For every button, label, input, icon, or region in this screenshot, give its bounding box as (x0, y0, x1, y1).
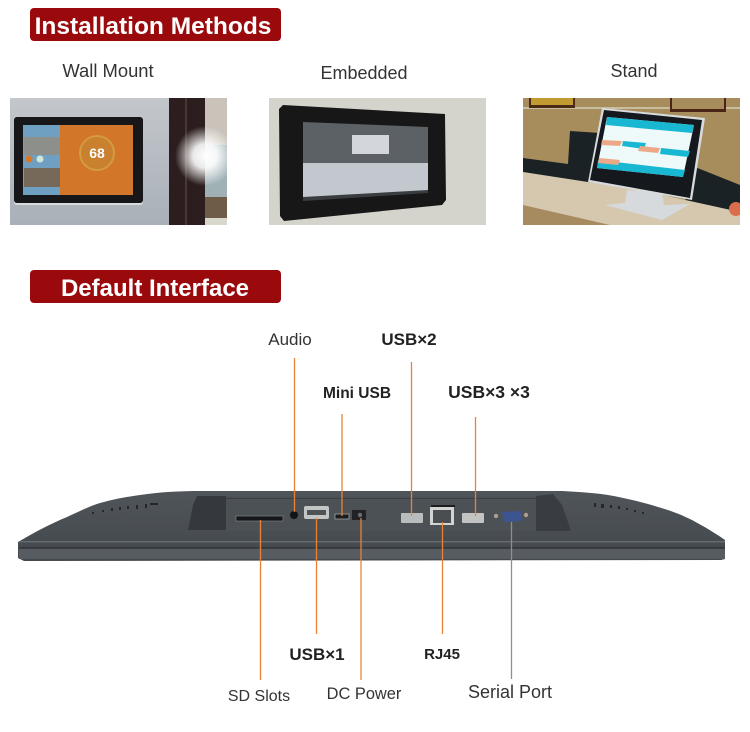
thermostat reading: 68 (89, 145, 105, 161)
heading: Installation Methods: Installation Methods (35, 13, 271, 40)
photo: wall mounted tablet (10, 98, 235, 225)
monitor: underside view with ports (18, 491, 725, 561)
label: Audio: Audio (268, 330, 312, 349)
vents: right (594, 503, 644, 514)
port: USB 1 (304, 506, 329, 519)
photo: tablet on stand (523, 98, 743, 225)
port: USB 2 (401, 513, 423, 523)
leader lines (260, 358, 512, 680)
label: USB×1: USB×1 (289, 645, 345, 664)
port: serial (494, 511, 528, 522)
label: Serial Port: Serial Port (468, 682, 552, 702)
port: RJ45 (430, 505, 455, 525)
vents: left (92, 503, 158, 514)
label: USB×3×3: USB×3 ×3 (448, 382, 530, 402)
port: SD slot (236, 516, 283, 521)
port: mini USB (335, 514, 349, 519)
heading: Default Interface (30, 270, 281, 303)
photo: embedded tablet (269, 98, 486, 225)
label: Mini USB: Mini USB (323, 385, 391, 402)
port: USB 3 (462, 513, 484, 523)
label: Embedded: Embedded (320, 63, 408, 83)
label: Stand: Stand (610, 61, 658, 81)
port: DC power (352, 510, 366, 520)
label: SD Slots: SD Slots (228, 688, 290, 705)
label: USB×2: USB×2 (381, 330, 437, 349)
port: audio jack (290, 511, 298, 519)
label: RJ45: RJ45 (424, 646, 460, 663)
label: Wall Mount: Wall Mount (62, 60, 154, 81)
heading: Default Interface: Default Interface (61, 275, 249, 302)
label: DC Power: DC Power (327, 685, 402, 703)
